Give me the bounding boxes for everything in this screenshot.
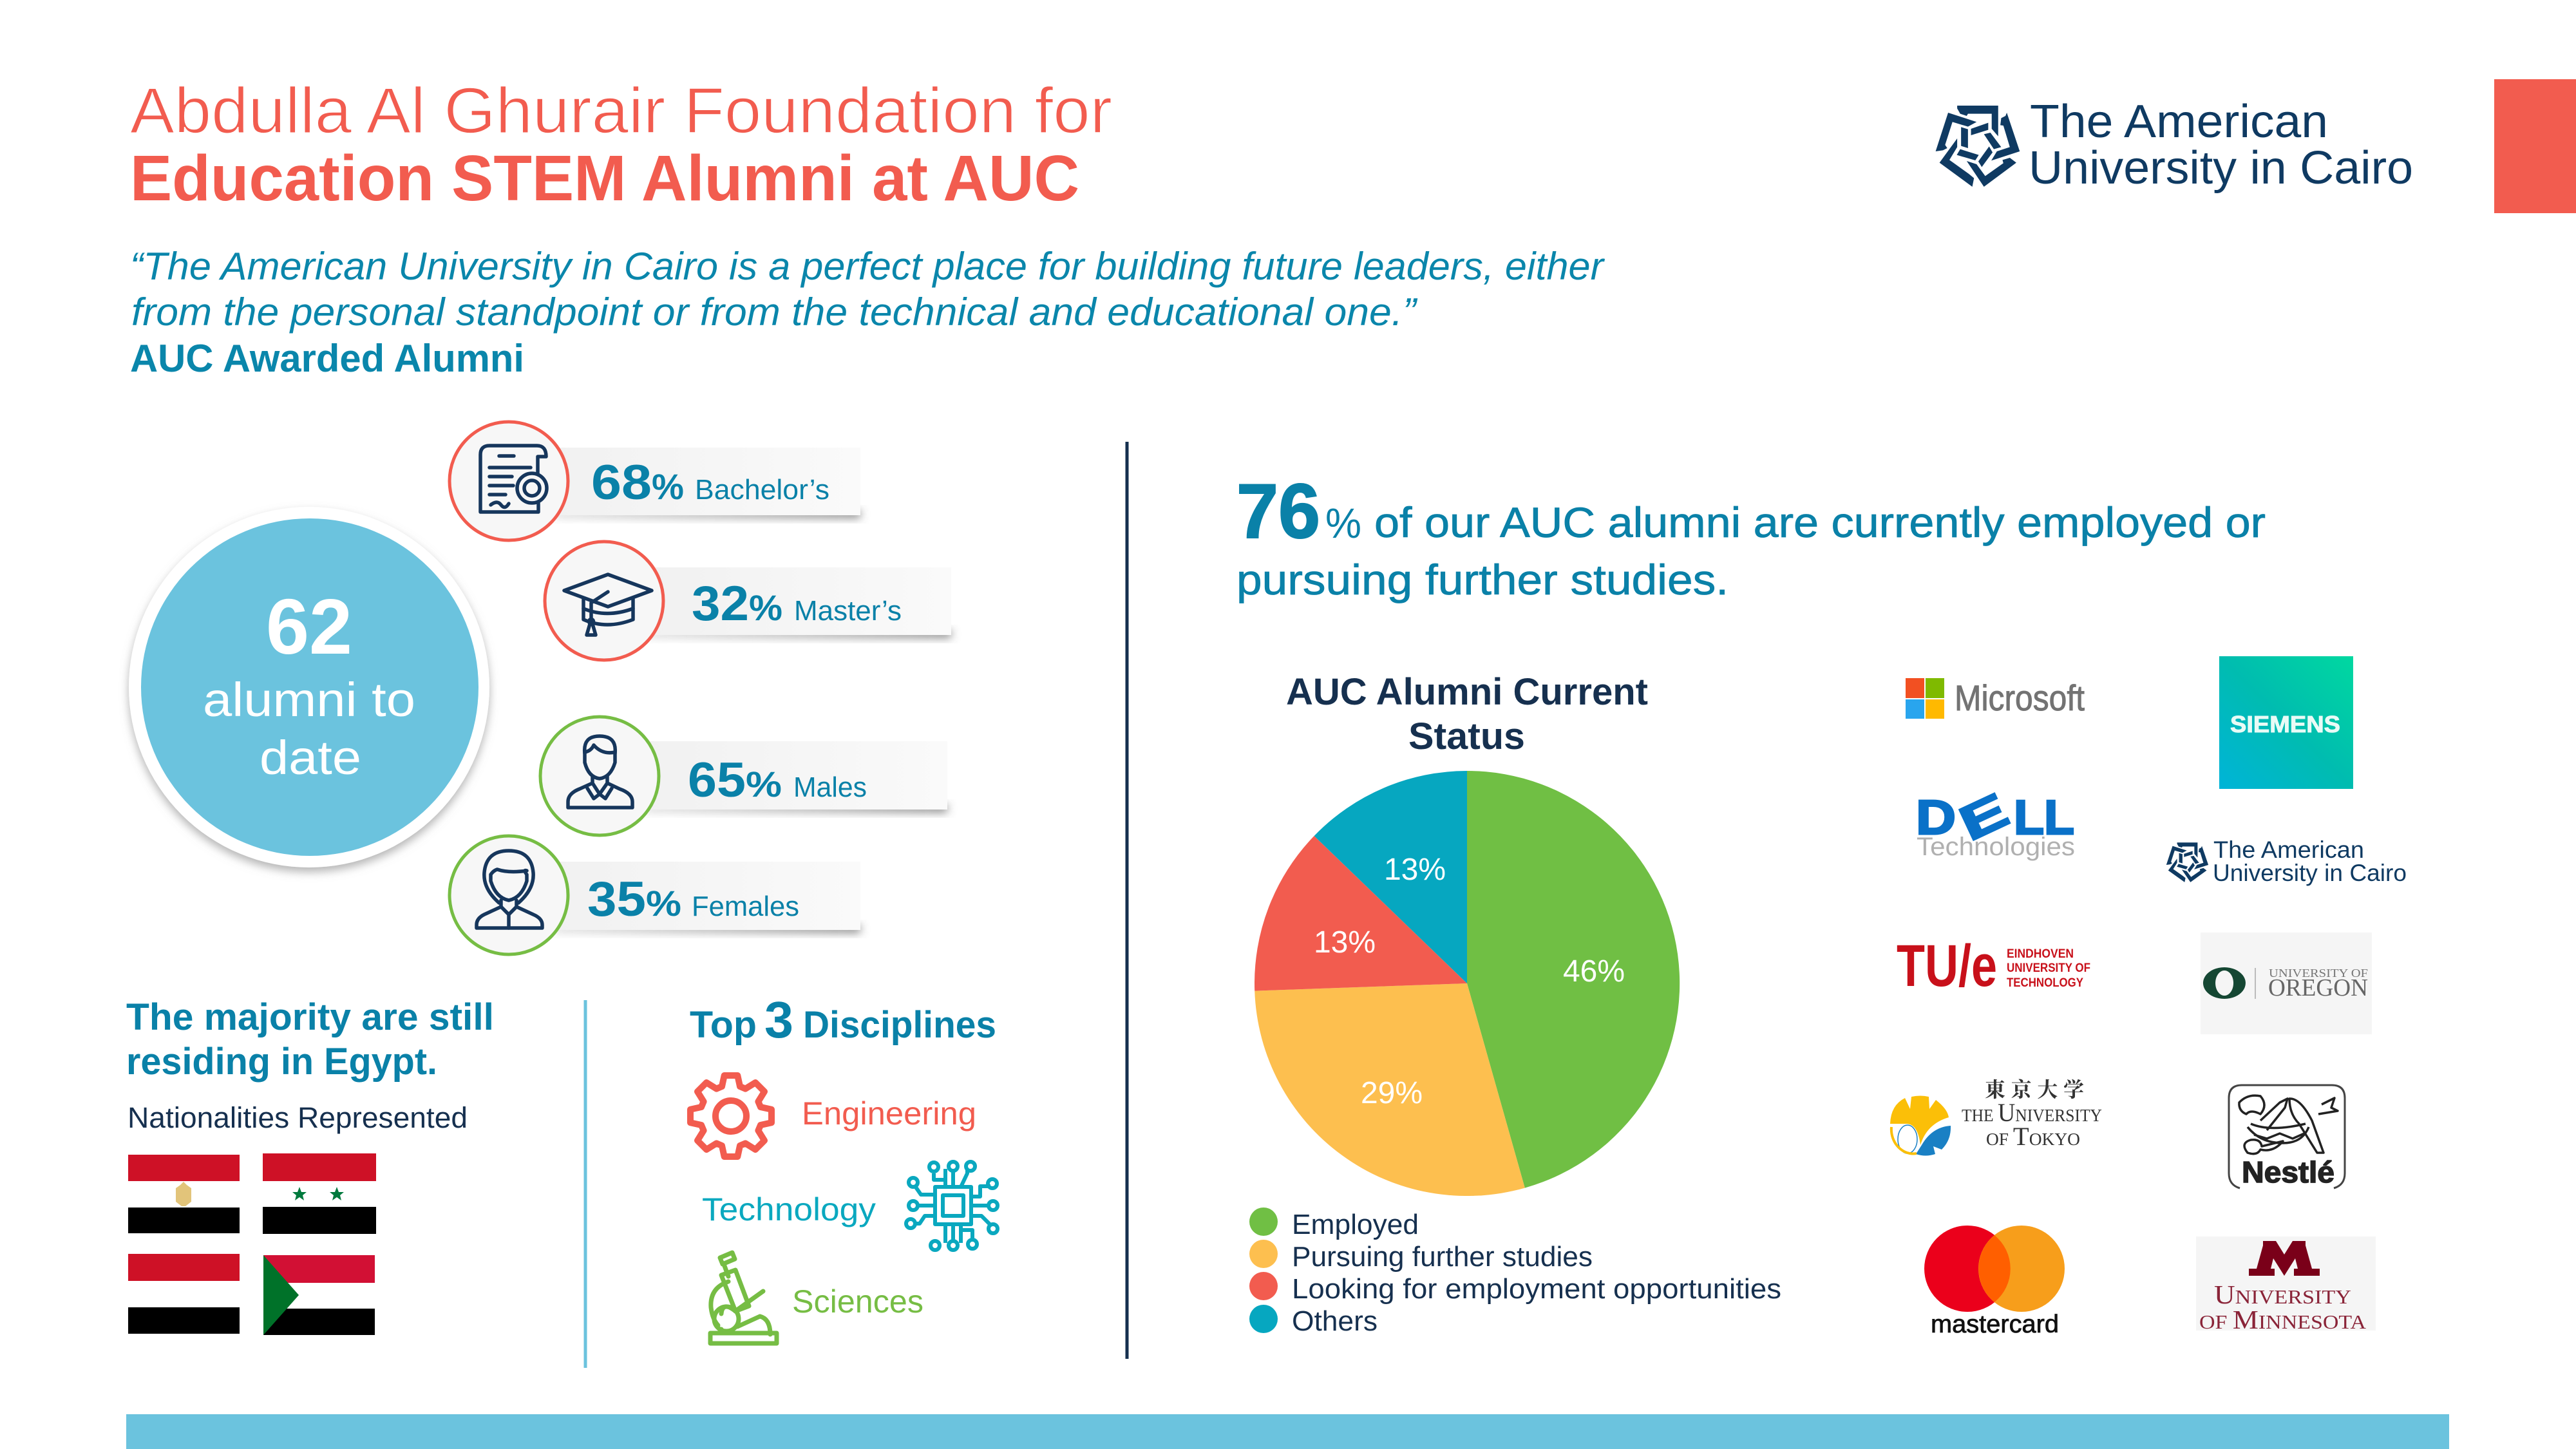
logo: University of Oregon: UNIVERSITY OF: [2269, 967, 2368, 980]
stat: 68% Bachelor's: %: [652, 466, 684, 507]
discipline: Engineering: [690, 1075, 976, 1157]
logo: TU/e: TU/e: [1897, 933, 1997, 999]
logo: AUC small: University in Cairo: [2213, 860, 2407, 886]
legend: Others: [1292, 1305, 1378, 1337]
stat: 32% Master's: Master’s: [794, 595, 902, 627]
residency heading: The majority are still: [126, 996, 494, 1038]
stat: 65% Males: 65: [688, 753, 746, 808]
logo: University of Minnesota: [2196, 1236, 2376, 1334]
quote text block: from the personal standpoint or from the technical and educational one.”: [131, 290, 1418, 334]
disciplines heading: Disciplines: [803, 1004, 996, 1046]
stat: 35% Females: 35: [587, 872, 646, 927]
logo: University of Oregon: [2201, 933, 2372, 1034]
discipline: Engineering: Engineering: [802, 1095, 976, 1132]
quote text block: AUC Awarded Alumni: [130, 337, 524, 380]
flag: Yemen: [128, 1254, 240, 1334]
icon: circuit chip: [906, 1162, 998, 1250]
legend: Looking for employment opportunities: [1292, 1273, 1781, 1305]
nationalities label: Nationalities Represented: [128, 1101, 468, 1134]
residency heading: [126, 996, 494, 1083]
logo: AUC small: [2166, 837, 2407, 886]
panel: alumni total circle: [129, 507, 489, 867]
legend: [1249, 1208, 1781, 1337]
headline: 76% employed: %: [1325, 499, 1361, 547]
logo: University of Oregon: OREGON: [2268, 974, 2368, 1001]
logo: University of Minnesota: OF MINNESOTA: [2199, 1305, 2367, 1334]
disciplines heading: 3: [764, 991, 793, 1048]
logo: Dell Technologies: D: [1916, 790, 1956, 844]
logo: Microsoft: Microsoft: [1955, 677, 2085, 718]
icon: diploma scroll: [480, 446, 547, 512]
chart title: [1286, 671, 1648, 757]
icon: male avatar: [568, 736, 632, 808]
logo: TU/e: EINDHOVEN: [2007, 947, 2074, 961]
logo: Dell Technologies: LL: [2014, 790, 2074, 844]
logo: TU/e: UNIVERSITY OF: [2007, 961, 2090, 975]
logo: University of Tokyo: [1890, 1078, 2102, 1155]
flag: Sudan: [263, 1255, 375, 1335]
stat: 68% Bachelor's: [450, 422, 860, 540]
logo: TU/e: TECHNOLOGY: [2007, 976, 2083, 990]
headline: 76% employed: of our AUC alumni are currently employed or: [1374, 498, 2266, 546]
logo: Dell Technologies: Technologies: [1917, 833, 2075, 861]
chart title: Status: [1408, 715, 1525, 757]
panel: alumni total circle: date: [260, 731, 361, 784]
logo: University of Tokyo: THE UNIVERSITY: [1962, 1098, 2102, 1127]
stat: 35% Females: Females: [692, 891, 799, 922]
discipline: Sciences: [710, 1253, 923, 1343]
headline: 76% employed: 76: [1236, 468, 1320, 554]
pie chart: 13%: [1314, 925, 1376, 960]
pie chart: 46%: [1563, 954, 1625, 989]
stat: 65% Males: [540, 717, 947, 835]
stat: 65% Males: %: [746, 764, 782, 804]
logo: Mastercard: [1924, 1226, 2065, 1338]
title: Abdulla Al Ghurair Foundation for: [130, 75, 1112, 147]
logo: Mastercard: mastercard: [1931, 1311, 2059, 1338]
title: Education STEM Alumni at AUC: [130, 142, 1079, 214]
logo: Microsoft: [1906, 677, 2085, 719]
divider: [583, 1000, 587, 1368]
chart title: AUC Alumni Current: [1286, 671, 1648, 713]
title: [130, 75, 1112, 214]
vertical divider: [1126, 442, 1128, 1359]
icon: microscope: [710, 1253, 777, 1343]
icon: graduation cap: [564, 574, 652, 635]
quote text block: “The American University in Cairo is a perfect place for building future leaders, either: [130, 245, 1605, 288]
pie chart: 29%: [1361, 1076, 1423, 1110]
flag: Syria: [263, 1153, 376, 1234]
pie chart: [1255, 771, 1680, 1196]
logo: Siemens: [2219, 656, 2353, 789]
logo: Nestle: Nestlé: [2242, 1155, 2334, 1189]
stat: 32% Master's: %: [749, 587, 782, 628]
AUC logo: The American: [2030, 96, 2328, 147]
stat: 65% Males: Males: [793, 772, 867, 803]
footer bar: [126, 1414, 2449, 1449]
quote text block: [130, 245, 1605, 380]
logo: TU/e: [1897, 933, 2090, 999]
panel: alumni total circle: alumni to: [203, 673, 415, 726]
icon: AUC star emblem: [1936, 106, 2020, 187]
panel: alumni total circle: 62: [266, 583, 352, 670]
stat: 32% Master's: 32: [692, 576, 749, 631]
stat: 68% Bachelor's: Bachelor’s: [695, 474, 829, 506]
discipline: Technology: [702, 1162, 998, 1250]
AUC logo: [1936, 96, 2413, 194]
legend: Pursuing further studies: [1292, 1241, 1593, 1273]
logo: University of Tokyo: OF TOKYO: [1986, 1122, 2080, 1151]
headline: 76% employed: pursuing further studies.: [1236, 556, 1728, 603]
logo: AUC small: The American: [2213, 837, 2364, 863]
logo: University of Tokyo: 東京大学: [1985, 1078, 2084, 1101]
pie chart: 13%: [1384, 853, 1446, 887]
residency heading: residing in Egypt.: [126, 1041, 437, 1083]
icon: female avatar: [477, 851, 542, 928]
red corner block: [2494, 79, 2576, 213]
disciplines heading: [690, 991, 996, 1048]
logo: University of Minnesota: UNIVERSITY: [2214, 1280, 2351, 1309]
legend: Employed: [1292, 1209, 1419, 1240]
stat: 35% Females: %: [646, 883, 681, 923]
logo: Siemens: SIEMENS: [2230, 711, 2340, 737]
headline: 76% employed: [1236, 468, 2266, 603]
stat: 35% Females: [450, 836, 860, 954]
logo: Nestle: [2229, 1085, 2345, 1189]
discipline: Sciences: Sciences: [792, 1283, 923, 1320]
logo: Dell Technologies: [1916, 782, 2075, 861]
stat: 32% Master's: [545, 542, 951, 660]
icon: gear: [690, 1075, 772, 1157]
stat: 68% Bachelor's: 68: [591, 455, 652, 510]
disciplines heading: Top: [690, 1004, 757, 1046]
AUC logo: University in Cairo: [2029, 142, 2413, 194]
logo: Dell Technologies: E: [1951, 782, 2016, 851]
discipline: Technology: Technology: [702, 1191, 876, 1227]
flag: Egypt: [128, 1155, 240, 1233]
